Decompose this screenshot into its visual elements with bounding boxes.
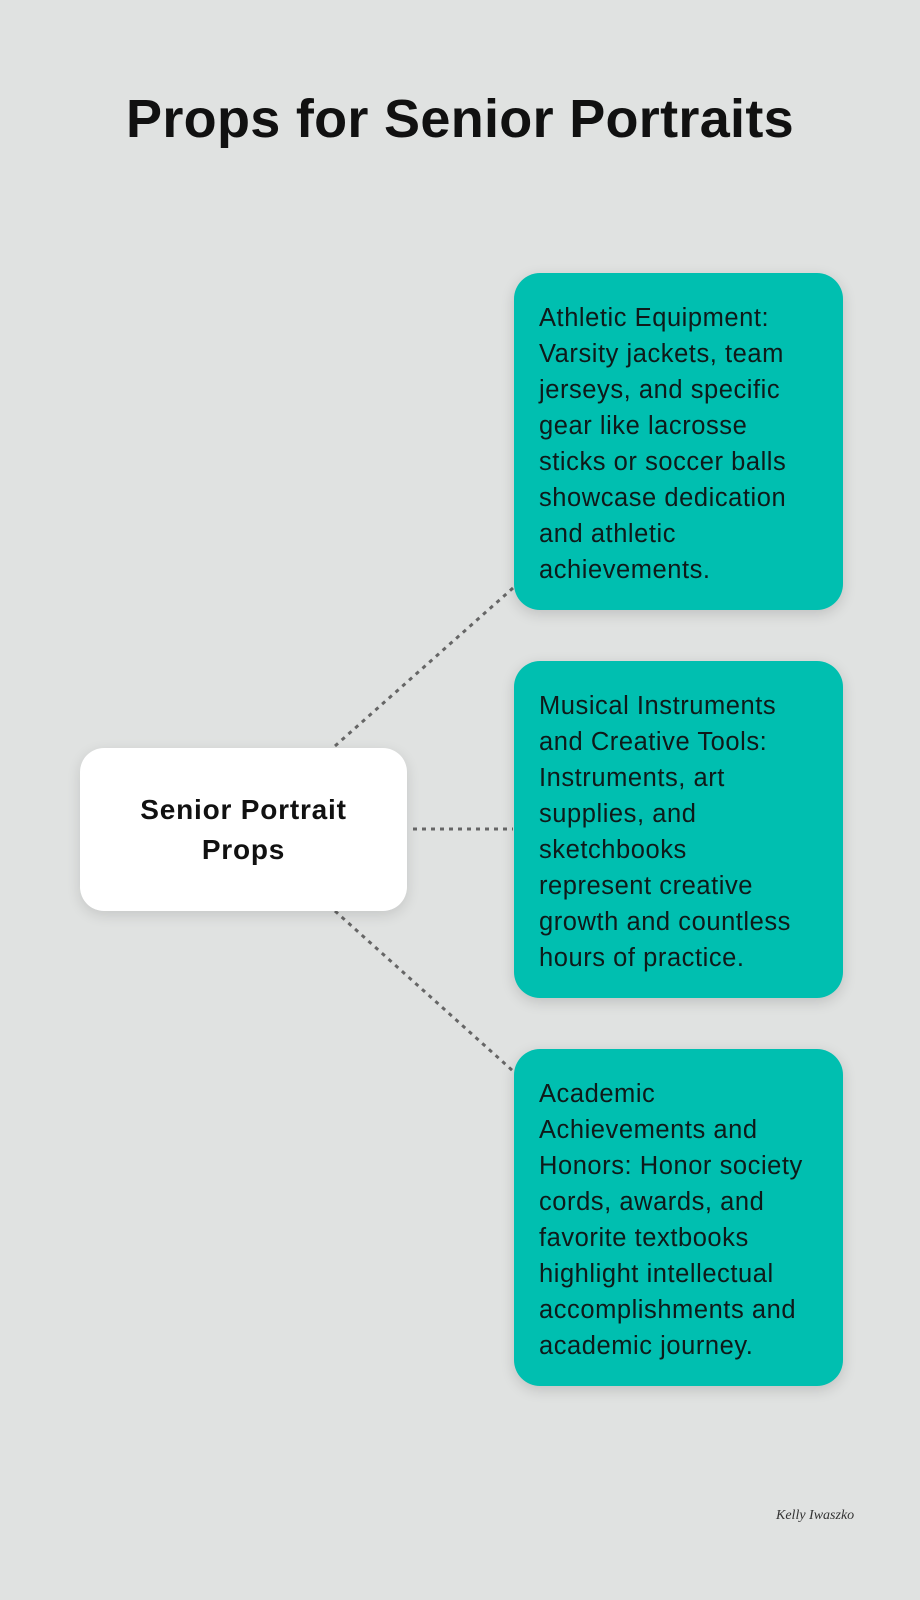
box: musical: growth and countless bbox=[539, 908, 791, 936]
box: academic: cords, awards, and bbox=[539, 1188, 764, 1216]
box: athletic: achievements. bbox=[539, 556, 711, 584]
box: academic: highlight intellectual bbox=[539, 1260, 774, 1288]
box: musical: and Creative Tools: bbox=[539, 728, 767, 756]
box: athletic: and athletic bbox=[539, 520, 676, 548]
box: athletic: sticks or soccer balls bbox=[539, 448, 786, 476]
box: academic: Achievements and bbox=[539, 1116, 758, 1144]
box: athletic: showcase dedication bbox=[539, 484, 786, 512]
box: musical: sketchbooks bbox=[539, 836, 687, 864]
box: athletic: Athletic Equipment: bbox=[539, 304, 769, 332]
box: academic: accomplishments and bbox=[539, 1296, 796, 1324]
center node: Props bbox=[202, 834, 285, 864]
box: musical: Instruments, art bbox=[539, 764, 725, 792]
box: academic: favorite textbooks bbox=[539, 1224, 749, 1252]
title: Props for Senior Portraits bbox=[126, 89, 794, 149]
signature: Kelly Iwaszko bbox=[776, 1508, 854, 1523]
center node: Senior Portrait bbox=[140, 794, 347, 824]
box: musical: Musical Instruments bbox=[539, 692, 776, 720]
box: academic bbox=[514, 1049, 843, 1386]
box: academic: Academic bbox=[539, 1080, 655, 1108]
center node bbox=[80, 748, 407, 911]
box: musical: represent creative bbox=[539, 872, 753, 900]
box: athletic bbox=[514, 273, 843, 610]
box: athletic: gear like lacrosse bbox=[539, 412, 747, 440]
box: academic: academic journey. bbox=[539, 1332, 753, 1360]
box: musical: supplies, and bbox=[539, 800, 696, 828]
box: musical bbox=[514, 661, 843, 998]
box: musical: hours of practice. bbox=[539, 944, 744, 972]
box: athletic: Varsity jackets, team bbox=[539, 340, 784, 368]
box: academic: Honors: Honor society bbox=[539, 1152, 803, 1180]
box: athletic: jerseys, and specific bbox=[539, 376, 780, 404]
